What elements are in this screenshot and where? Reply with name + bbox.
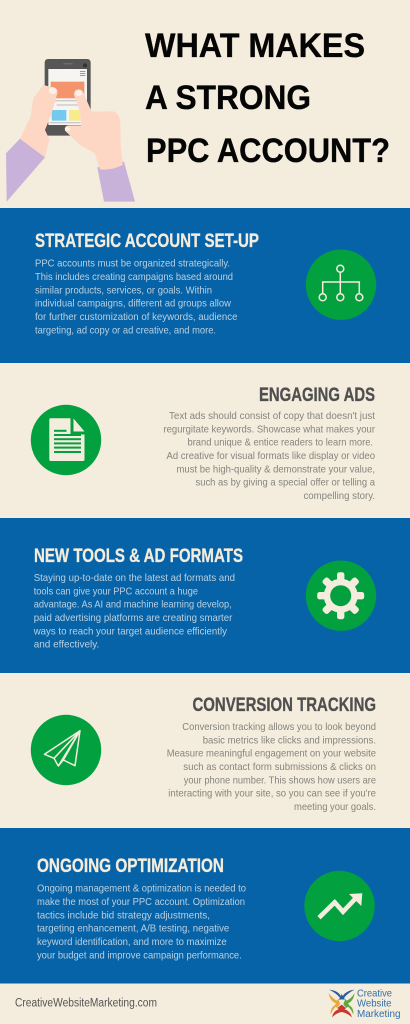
phone (45, 59, 91, 136)
right hand (65, 89, 123, 170)
body text: regurgitate keywords. Showcase what makes your (164, 424, 375, 435)
body text: This includes creating campaigns based around (35, 272, 233, 283)
body text: tools can give your PPC account a huge (34, 586, 198, 597)
icon: org chart (306, 250, 376, 320)
logo wordmark: Creative (357, 989, 392, 1000)
fingernails (49, 87, 82, 131)
panel: conversion tracking (0, 673, 410, 828)
title: A STRONG (145, 79, 311, 117)
heading: ENGAGING ADS (259, 384, 375, 406)
logo (329, 989, 401, 1020)
logo mark: four arrows (329, 990, 355, 1017)
body text: brand unique & entice readers to learn more. (188, 438, 373, 449)
panel: strategic account set-up (0, 208, 410, 363)
logo wordmark: Marketing (357, 1009, 401, 1020)
icon: gear (306, 560, 376, 631)
panel: ongoing optimization (0, 828, 410, 984)
body text: individual campaigns, different ad groups allow (35, 299, 231, 310)
body text: targeting, ad copy or ad creative, and more. (35, 325, 216, 336)
body text: Measure meaningful engagement on your website (167, 749, 376, 760)
body text: for further customization of keywords, audience (35, 312, 238, 323)
body text: Ongoing management & optimization is needed to (37, 884, 246, 895)
footer (0, 984, 410, 1024)
body text: compelling story. (304, 491, 375, 502)
illustration: hands holding phone (6, 59, 135, 202)
body text: tactics include bid strategy adjustments, (37, 910, 210, 921)
icon: trending arrow (304, 871, 375, 941)
body text: targeting enhancement, A/B testing, negative (37, 924, 229, 935)
body text: your phone number. This shows how users are (184, 775, 376, 786)
body text: basic metrics like clicks and impressions. (203, 735, 376, 746)
panel: engaging ads (0, 363, 410, 518)
heading: NEW TOOLS & AD FORMATS (34, 545, 243, 567)
heading: STRATEGIC ACCOUNT SET-UP (35, 230, 259, 252)
body text: and effectively. (34, 640, 99, 651)
icon: paper plane (31, 715, 101, 785)
body text (35, 259, 238, 336)
body text: such as contact form submissions & clicks on (183, 762, 376, 773)
body text: paid advertising platforms are creating smarter (34, 613, 233, 624)
title (145, 27, 390, 170)
body text: similar products, services, or goals. Within (35, 285, 212, 296)
body text: Text ads should consist of copy that doesn't just (169, 411, 375, 422)
header panel (6, 27, 390, 202)
body text (167, 722, 376, 813)
body text: such as by giving a special offer or telling a (196, 478, 375, 489)
right sleeve (97, 162, 135, 202)
panel: new tools and ad formats (0, 518, 410, 673)
body text: your budget and improve campaign performance. (37, 950, 242, 961)
website url: CreativeWebsiteMarketing.com (15, 998, 157, 1010)
body text (164, 411, 375, 502)
body text: must be high-quality & demonstrate your value, (176, 464, 375, 475)
logo wordmark (357, 989, 401, 1020)
body text: PPC accounts must be organized strategically. (35, 259, 230, 270)
body text: advantage. As AI and machine learning develop, (34, 600, 232, 611)
body text (33, 573, 235, 651)
icon: document (31, 405, 101, 475)
heading: ONGOING OPTIMIZATION (37, 855, 224, 877)
title: WHAT MAKES (145, 27, 365, 65)
body text: meeting your goals. (294, 802, 376, 813)
left hand (20, 85, 57, 157)
body text: Staying up-to-date on the latest ad formats and (34, 573, 235, 584)
body text: Ad creative for visual formats like display or video (166, 451, 375, 462)
body text: keyword identification, and more to maximize (37, 937, 227, 948)
body text: Conversion tracking allows you to look beyond (182, 722, 376, 733)
body text: make the most of your PPC account. Optimization (37, 897, 245, 908)
body text (37, 884, 246, 961)
left sleeve (6, 139, 45, 202)
body text: ways to reach your target audience efficiently (33, 626, 228, 637)
logo wordmark: Website (357, 999, 392, 1010)
body text: interacting with your site, so you can see if you're (168, 789, 376, 800)
